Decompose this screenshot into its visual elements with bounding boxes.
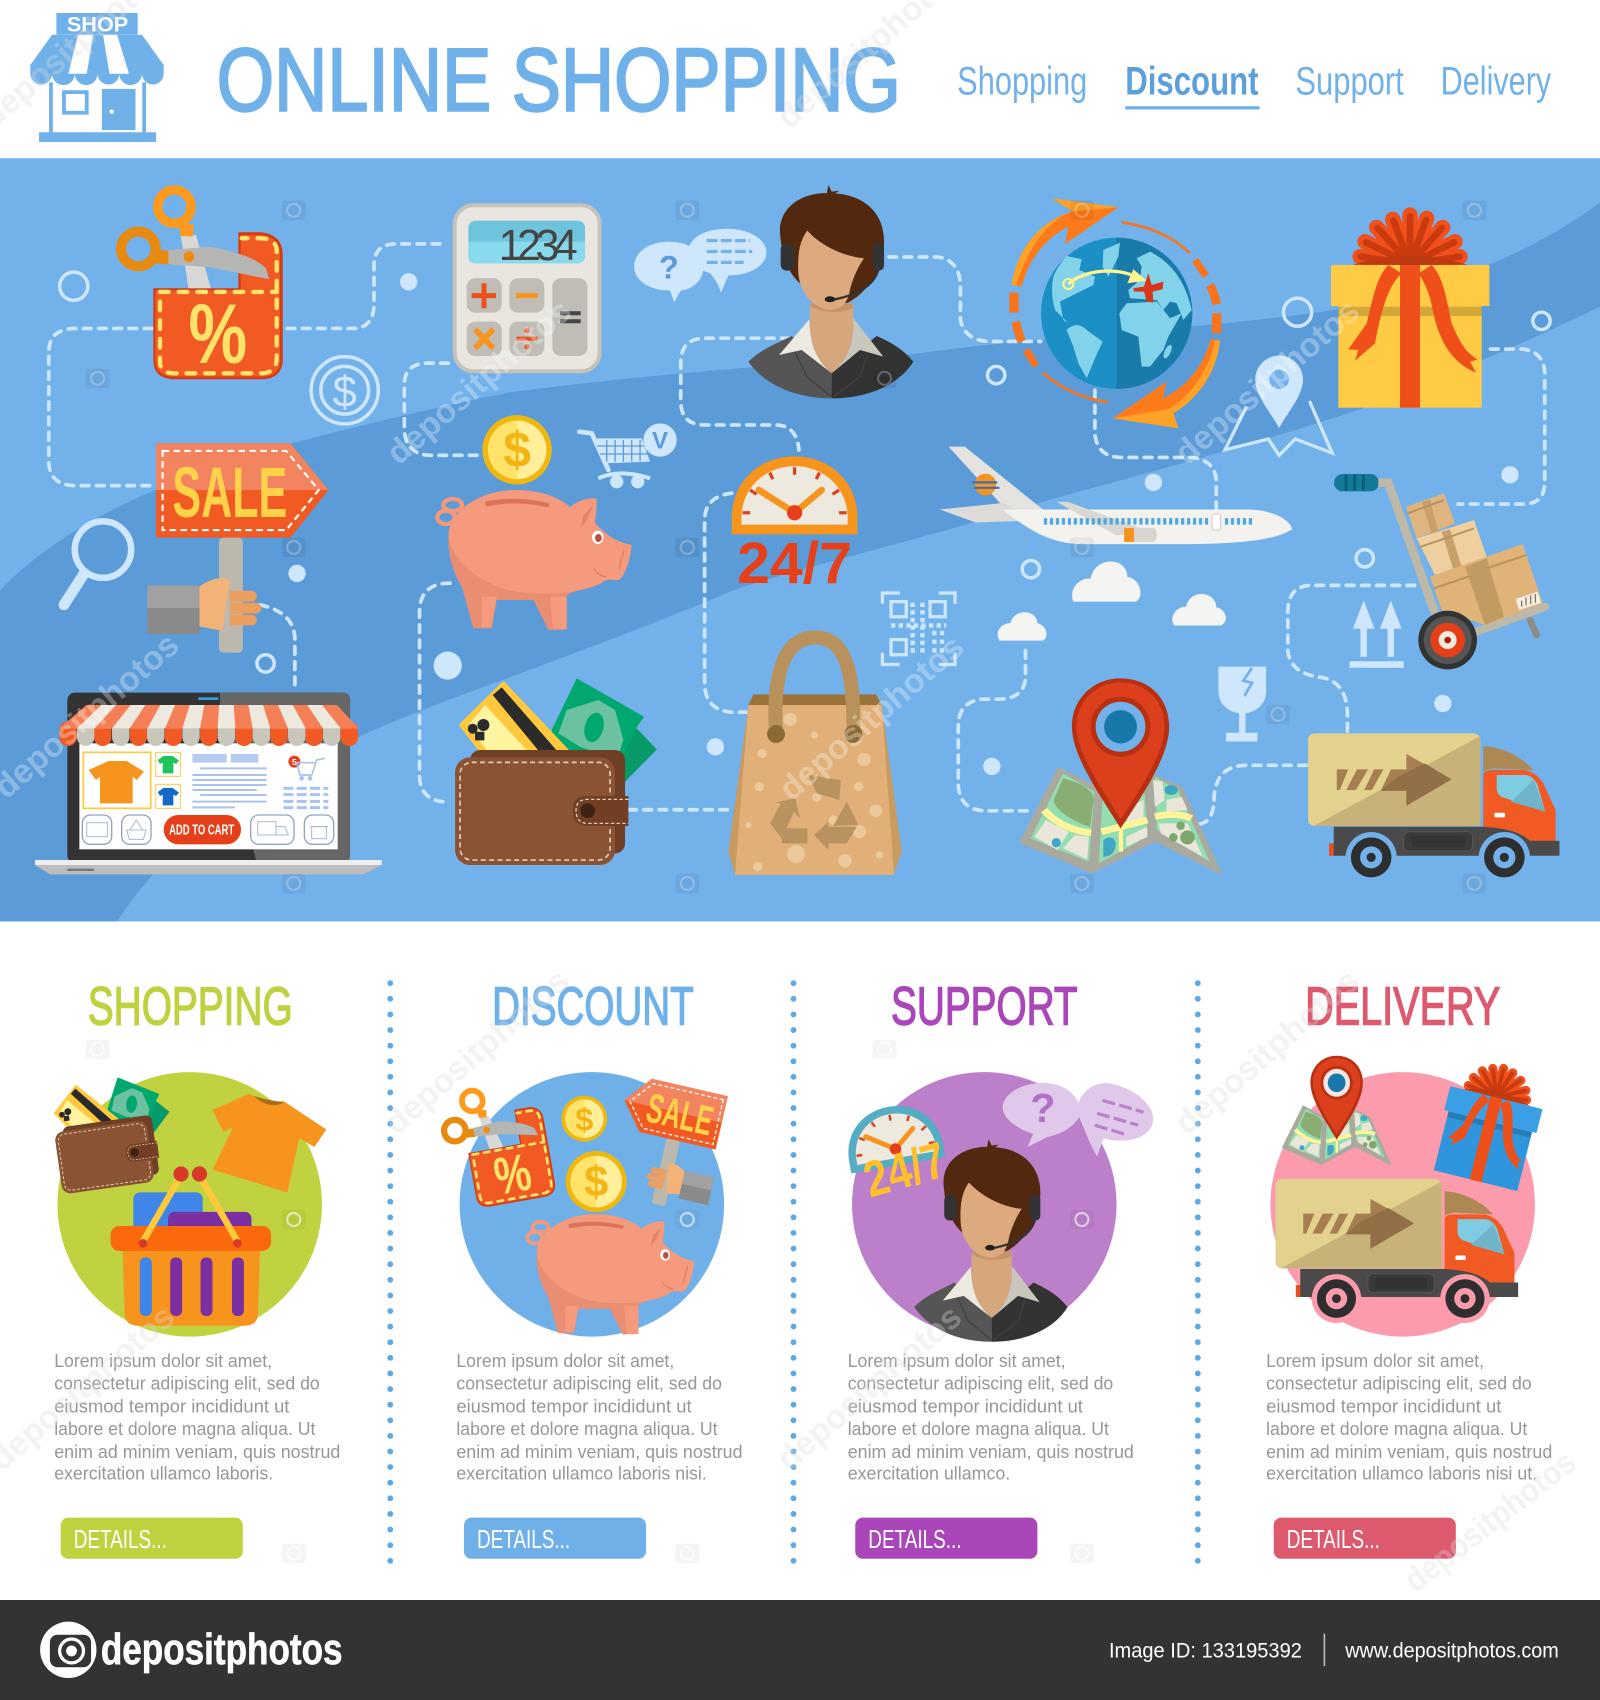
body text: delivery: labore et dolore magna aliqua. Ut <box>1266 1418 1527 1439</box>
button: support details <box>855 1518 1037 1559</box>
label: add to cart: ADD TO CART <box>169 822 235 839</box>
icon: coupon with scissors: % <box>189 286 247 381</box>
body text: discount: enim ad minim veniam, quis nostrud <box>456 1441 743 1462</box>
button: shopping details: DETAILS... <box>74 1524 167 1554</box>
icon: shopping cart <box>579 423 677 488</box>
footer image id: Image ID: 133195392 <box>1109 1639 1302 1662</box>
body text: discount: eiusmod tempor incididunt ut <box>456 1395 692 1416</box>
icon: coins <box>561 1096 627 1212</box>
heading: delivery: DELIVERY <box>1305 976 1500 1036</box>
banner background <box>0 158 1600 921</box>
icon: magnifier <box>64 521 131 605</box>
icon: gift small <box>1430 1057 1550 1192</box>
navigation: Delivery <box>1441 59 1551 103</box>
icon: recycled paper bag <box>728 637 902 875</box>
icon: 24/7 clock <box>732 456 857 596</box>
watermarks: depositphotos <box>772 628 971 808</box>
body text: support: enim ad minim veniam, quis nostrud <box>848 1441 1134 1462</box>
button: shopping details <box>61 1518 243 1559</box>
circle: support background <box>852 1072 1117 1337</box>
icon: fragile glass <box>1218 667 1266 741</box>
icon: map pin outline <box>1225 356 1332 455</box>
body text: discount: consectetur adipiscing elit, sed do <box>456 1373 722 1394</box>
footer logo: depositphotos <box>101 1626 343 1674</box>
heading: support: SUPPORT <box>891 976 1078 1036</box>
icon: clouds <box>998 562 1226 641</box>
navigation: Shopping <box>957 59 1087 103</box>
body text: support: consectetur adipiscing elit, sed do <box>848 1373 1113 1394</box>
icon: 24/7 clock: 24/7 <box>737 531 852 596</box>
body text: discount: Lorem ipsum dolor sit amet, <box>456 1350 674 1371</box>
icon: laptop shop: 5 <box>292 757 297 767</box>
body text: support: eiusmod tempor incididunt ut <box>848 1395 1083 1416</box>
circle: shopping background <box>57 1072 322 1337</box>
icon: this way up arrows <box>1350 601 1404 668</box>
body text: shopping: labore et dolore magna aliqua. Ut <box>54 1418 315 1439</box>
icon: dollar badge: $ <box>333 369 357 417</box>
icon: piggy bank <box>437 415 632 630</box>
discount column <box>438 976 743 1559</box>
body text: shopping: enim ad minim veniam, quis nostrud <box>54 1441 340 1462</box>
icon: piggy bank: $ <box>503 422 531 478</box>
icon: clock small <box>841 1099 945 1174</box>
footer logo <box>40 1622 343 1678</box>
body text: shopping: consectetur adipiscing elit, sed do <box>54 1373 320 1394</box>
button: discount details: DETAILS... <box>477 1524 570 1554</box>
body text: support: exercitation ullamco. <box>848 1463 1010 1484</box>
button: delivery details <box>1274 1518 1456 1559</box>
body text: delivery: eiusmod tempor incididunt ut <box>1266 1395 1501 1416</box>
circle: discount background <box>460 1072 724 1337</box>
body text: support: labore et dolore magna aliqua. Ut <box>848 1418 1109 1439</box>
icon: gift box <box>1331 215 1489 408</box>
watermarks: depositphotos <box>770 1298 969 1478</box>
icon: dollar badge <box>311 357 378 424</box>
icon: speech bubbles: ? <box>659 250 679 286</box>
icon: sale sign in hand: SALE <box>172 453 287 533</box>
icon: laptop shop <box>35 693 382 874</box>
icon: agent small <box>914 1139 1068 1342</box>
icon: t-shirt <box>212 1094 326 1192</box>
body text: delivery: enim ad minim veniam, quis nostrud <box>1266 1441 1552 1462</box>
icon: truck small <box>1276 1179 1518 1323</box>
icon: coins: $ <box>584 1159 608 1207</box>
body text: support: Lorem ipsum dolor sit amet, <box>848 1350 1066 1371</box>
navigation: Support <box>1295 59 1404 103</box>
icon: wallet small <box>48 1071 179 1194</box>
icon: QR code <box>882 593 955 664</box>
heading: discount: DISCOUNT <box>492 976 694 1036</box>
icon: speech bubbles small <box>1003 1083 1153 1157</box>
small circles <box>60 272 1550 775</box>
icon: shop: SHOP <box>67 11 128 36</box>
footer url: www.depositphotos.com <box>1344 1639 1559 1662</box>
icon: piggy bank small <box>527 1214 694 1335</box>
icon: shopping cart: V <box>652 427 668 454</box>
navigation <box>957 59 1551 109</box>
banner diagonal band <box>0 203 1600 921</box>
navigation: Discount <box>1125 59 1259 103</box>
icon: hand truck with boxes <box>1334 474 1545 669</box>
icon: sale sign small <box>603 1074 733 1216</box>
title: ONLINE SHOPPING <box>217 31 901 130</box>
footer bar <box>0 1600 1600 1700</box>
body text: delivery: Lorem ipsum dolor sit amet, <box>1266 1350 1484 1371</box>
icon: coins: $ <box>575 1102 593 1138</box>
icon: delivery truck <box>1308 733 1559 883</box>
header background <box>0 0 1600 158</box>
body text: discount: labore et dolore magna aliqua. Ut <box>456 1418 718 1439</box>
support column <box>841 976 1153 1559</box>
icon: calculator <box>455 205 600 371</box>
dotted dividers <box>390 983 1198 1565</box>
icon: map pin small <box>1282 1056 1392 1166</box>
body text: shopping: eiusmod tempor incididunt ut <box>54 1395 289 1416</box>
icon: sale sign in hand <box>147 443 328 653</box>
body text: discount: exercitation ullamco laboris nisi. <box>456 1463 707 1484</box>
icon: speech bubbles <box>634 229 766 302</box>
icon: shop <box>30 11 164 142</box>
icon: coupon small: % <box>490 1143 536 1207</box>
icon: coupon small <box>438 1079 557 1214</box>
watermarks: depositphotos <box>380 292 579 472</box>
delivery column <box>1266 976 1552 1559</box>
button: delivery details: DETAILS... <box>1287 1524 1380 1554</box>
body text: delivery: exercitation ullamco laboris nisi ut. <box>1266 1463 1537 1484</box>
icon: globe with arrows <box>1012 198 1220 428</box>
circle: delivery background <box>1270 1072 1535 1337</box>
shopping column <box>48 976 340 1559</box>
watermarks: depositphotos <box>1398 1444 1583 1600</box>
watermarks: depositphotos <box>378 962 577 1142</box>
button: support details: DETAILS... <box>868 1524 962 1554</box>
heading: shopping: SHOPPING <box>88 976 293 1036</box>
icon: coupon with scissors <box>121 190 283 381</box>
body text: shopping <box>54 1350 340 1484</box>
icon: sale sign small: SALE <box>642 1084 718 1145</box>
icon: speech bubbles small: ? <box>1030 1085 1055 1131</box>
watermarks: depositphotos <box>1168 962 1367 1142</box>
dashed connector paths <box>49 244 1545 824</box>
icon: support agent <box>748 185 913 398</box>
icon: basket <box>111 1166 271 1326</box>
body text: shopping: Lorem ipsum dolor sit amet, <box>54 1350 272 1371</box>
body text: delivery: consectetur adipiscing elit, sed do <box>1266 1373 1532 1394</box>
icon: wallet with card and cash <box>455 678 657 865</box>
button: discount details <box>464 1518 646 1559</box>
label: 24/7: 24/7 <box>857 1131 952 1208</box>
icon: airplane <box>940 447 1292 544</box>
body text: discount <box>456 1350 743 1484</box>
footer divider <box>1324 1634 1325 1666</box>
icon: calculator: 1234 <box>499 222 578 270</box>
icon: map with location pin <box>1019 678 1223 875</box>
body text: delivery <box>1266 1350 1552 1484</box>
body text: shopping: exercitation ullamco laboris. <box>54 1463 273 1484</box>
watermarks: depositphotos <box>1168 292 1367 472</box>
body text: support <box>848 1350 1134 1484</box>
